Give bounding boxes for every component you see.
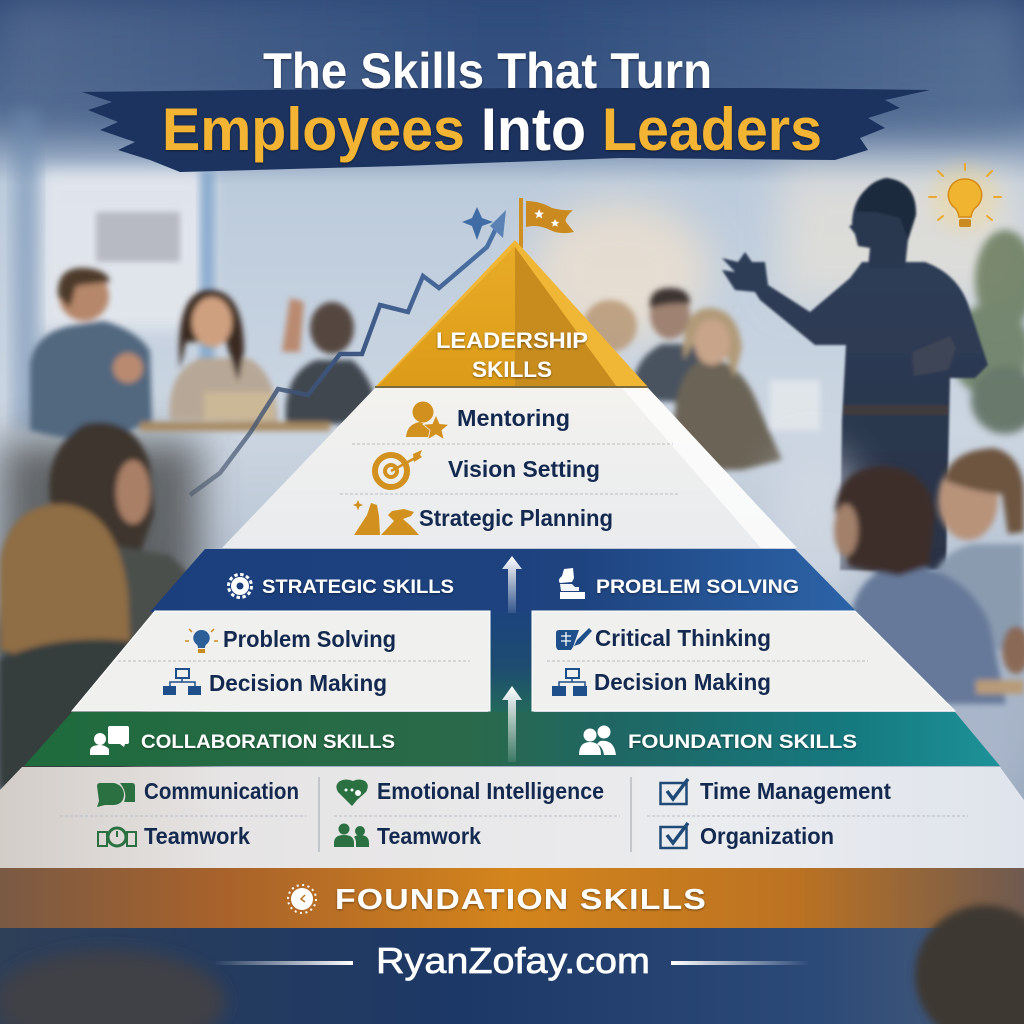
label: leadership skills: SKILLS: [472, 357, 552, 382]
icon: communication: [97, 783, 135, 807]
icon: teamwork clock: [98, 828, 136, 846]
label: mentoring: Mentoring: [457, 405, 570, 431]
title banner brush stroke: [82, 88, 930, 172]
icon: gear: [228, 574, 252, 598]
icon: problem solving: [559, 568, 585, 599]
footer line right: [671, 961, 810, 965]
label: vision setting: Vision Setting: [448, 456, 600, 482]
central channel behind arrows: [488, 608, 534, 714]
icon: foundation people: [579, 726, 616, 755]
label: leadership skills: [436, 328, 588, 382]
presenter silhouette: [722, 178, 988, 570]
footer line left: [212, 961, 353, 965]
label: foundation skills: FOUNDATION SKILLS: [628, 731, 857, 753]
icon: decision tree: [552, 669, 587, 696]
panel: strategic skills list: [72, 611, 490, 711]
arrow: up collaboration: [502, 686, 522, 762]
label: organization: Organization: [700, 823, 834, 849]
label: decision making: Decision Making: [209, 670, 387, 696]
icon: critical thinking: [556, 628, 592, 650]
label: time management: Time Management: [700, 778, 891, 804]
label: decision making: Decision Making: [594, 669, 771, 695]
footer: [0, 905, 1024, 1024]
icon: target: [375, 450, 422, 487]
icon: sun clock: [288, 885, 316, 913]
background people: centre right group: [583, 288, 820, 470]
plant: [950, 230, 1024, 434]
icon: collaboration: [90, 726, 129, 755]
icon: lightbulb idea: [185, 629, 218, 653]
title line 2: Employees Into Leaders: [162, 96, 822, 163]
arrow: up strategic: [502, 556, 522, 613]
band: strategic and problem solving: [150, 549, 857, 612]
pyramid tier: leadership skills: [375, 240, 648, 388]
panel: foundation list: [0, 767, 1024, 868]
label: teamwork: Teamwork: [377, 823, 481, 849]
icon: team people: [334, 824, 369, 847]
label: foundation skills: FOUNDATION SKILLS: [335, 884, 707, 916]
label: communication: Communication: [144, 778, 299, 804]
label: strategic planning: Strategic Planning: [419, 505, 613, 531]
label: leadership skills: LEADERSHIP: [436, 328, 588, 353]
icon: emotional intelligence: [336, 780, 368, 806]
sparkle star: [462, 207, 493, 240]
title line 1: The Skills That Turn: [263, 43, 712, 99]
icon: light bulb: [929, 164, 1001, 232]
pyramid tier: leadership list: [222, 388, 797, 548]
panel: problem solving list: [532, 611, 955, 711]
title: [162, 43, 822, 163]
background people: left group: [0, 268, 380, 790]
icon: checkbox: [660, 779, 688, 804]
label: teamwork: Teamwork: [144, 823, 250, 849]
label: critical thinking: Critical Thinking: [595, 625, 771, 651]
icon: strategy peaks: [353, 500, 419, 535]
icon: mentoring: [406, 402, 448, 439]
website: RyanZofay.com: [376, 940, 650, 981]
label: emotional intelligence: Emotional Intelligence: [377, 778, 604, 804]
icon: checkbox: [660, 823, 688, 848]
mist: right of pyramid: [765, 450, 865, 610]
label: problem solving: PROBLEM SOLVING: [596, 576, 799, 598]
label: problem solving: Problem Solving: [223, 626, 396, 652]
label: strategic skills: STRATEGIC SKILLS: [262, 576, 454, 598]
label: collaboration skills: COLLABORATION SKILLS: [141, 731, 395, 753]
band: foundation skills orange: [0, 868, 1024, 928]
flag: [519, 198, 574, 248]
background people: lower right group: [834, 448, 1024, 704]
icon: decision tree: [163, 669, 201, 695]
band: collaboration and foundation skills: [24, 712, 1000, 766]
rising chart arrow: [190, 207, 506, 495]
